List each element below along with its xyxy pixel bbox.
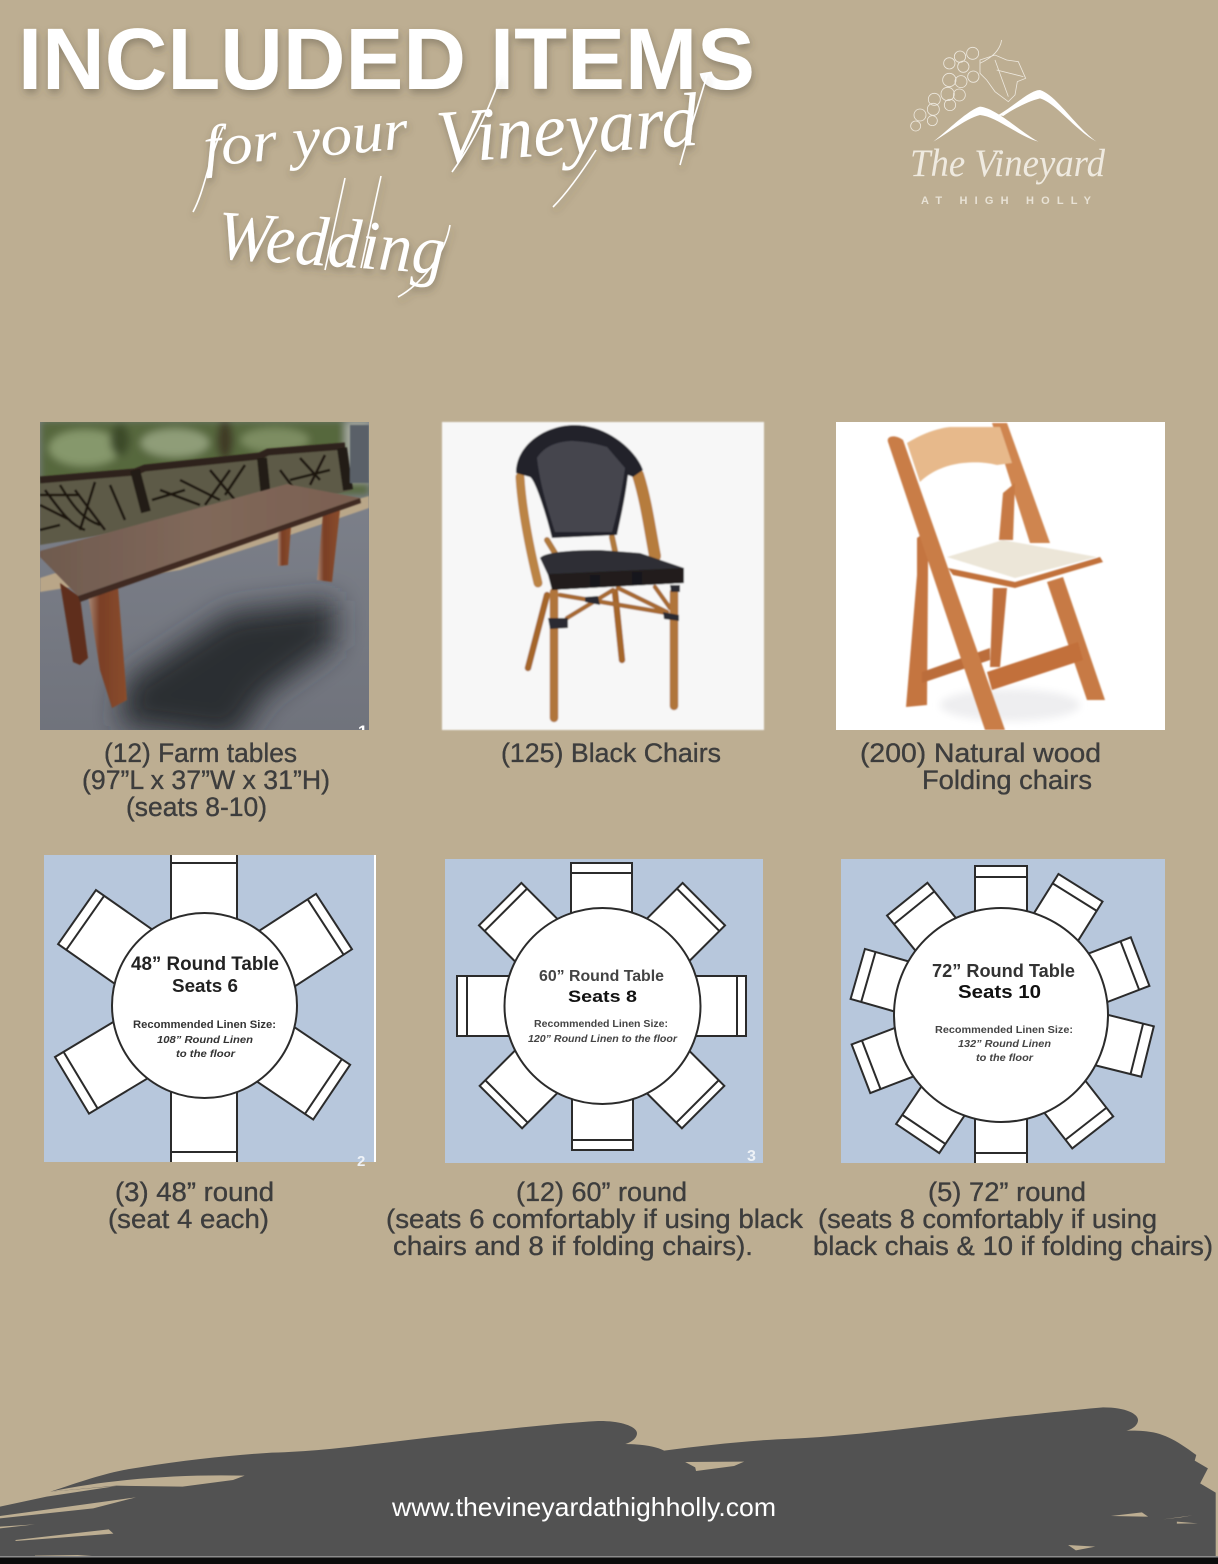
diagram: 72 inch round table bbox=[841, 859, 1165, 1164]
table text bbox=[528, 968, 678, 1045]
label: folding chairs: Folding chairs bbox=[922, 765, 1092, 795]
bottom edge strip bbox=[0, 1556, 1218, 1564]
label: black chairs: (125) Black Chairs bbox=[501, 738, 721, 768]
title: included items: INCLUDED ITEMS bbox=[18, 11, 755, 108]
table text: Recommended Linen Size: bbox=[133, 1019, 276, 1031]
table text: 120” Round Linen to the floor bbox=[528, 1033, 678, 1045]
logo icon: grapes, leaf and mountains bbox=[911, 40, 1097, 142]
label: 72 inch round: (seats 8 comfortably if using bbox=[818, 1204, 1157, 1234]
table text: 60” Round Table bbox=[539, 968, 664, 985]
photo number: 3 bbox=[747, 1148, 756, 1165]
photo: farm table bbox=[40, 420, 369, 741]
label: farm tables: (seats 8-10) bbox=[126, 792, 267, 822]
label: 72 inch round: (5) 72” round bbox=[928, 1177, 1086, 1207]
subtitle: for your Vineyard Wedding: for your bbox=[200, 96, 411, 179]
table text: 108” Round Linen bbox=[157, 1034, 253, 1046]
subtitle: for your Vineyard Wedding: Wedding bbox=[215, 197, 448, 290]
label: 60 inch round: (seats 6 comfortably if using black bbox=[386, 1204, 803, 1234]
table text: Recommended Linen Size: bbox=[935, 1024, 1073, 1036]
label: 60 inch round: (12) 60” round bbox=[516, 1177, 687, 1207]
footer: website url: www.thevineyardathighholly.com bbox=[391, 1492, 776, 1522]
label: 72 inch round: black chais & 10 if folding chairs) bbox=[813, 1231, 1213, 1261]
table text bbox=[131, 954, 279, 1060]
chair back bbox=[516, 425, 643, 538]
logo tagline: AT HIGH HOLLY bbox=[921, 195, 1092, 207]
label: folding chairs: (200) Natural wood bbox=[860, 738, 1101, 768]
table text: 72” Round Table bbox=[932, 961, 1075, 981]
table text: Seats 6 bbox=[172, 976, 238, 996]
label: 48 inch round bbox=[108, 1177, 274, 1234]
label: farm tables bbox=[82, 738, 330, 822]
label: 60 inch round: chairs and 8 if folding chairs). bbox=[393, 1231, 753, 1261]
label: 48 inch round: (3) 48” round bbox=[115, 1177, 274, 1207]
label: 48 inch round: (seat 4 each) bbox=[108, 1204, 269, 1234]
table text: 132” Round Linen bbox=[958, 1038, 1051, 1050]
subtitle: for your Vineyard Wedding bbox=[193, 75, 707, 297]
subtitle: for your Vineyard Wedding: Vineyard bbox=[433, 78, 702, 180]
label: farm tables: (97”L x 37”W x 31”H) bbox=[82, 765, 330, 795]
photo number: 2 bbox=[357, 1153, 365, 1170]
table text: 48” Round Table bbox=[131, 954, 279, 975]
photo number: 1 bbox=[358, 722, 367, 741]
label: 60 inch round bbox=[386, 1177, 803, 1261]
diagram: 60 inch round table bbox=[445, 859, 763, 1165]
photo number: 8 bbox=[1148, 727, 1157, 746]
table text: to the floor bbox=[976, 1052, 1034, 1064]
table text: Seats 8 bbox=[568, 987, 637, 1006]
diagram: 48 inch round table bbox=[44, 845, 376, 1170]
floor shadow bbox=[120, 600, 335, 740]
table text bbox=[932, 961, 1075, 1064]
photo: black bistro chair bbox=[442, 422, 764, 730]
table text: to the floor bbox=[176, 1048, 236, 1060]
footer: dark brush stroke band bbox=[0, 1407, 1216, 1557]
logo wordmark: The Vineyard bbox=[910, 142, 1105, 185]
label: farm tables: (12) Farm tables bbox=[104, 738, 297, 768]
label: 72 inch round bbox=[813, 1177, 1213, 1261]
photo: natural wood folding chair bbox=[836, 422, 1165, 746]
label: folding chairs bbox=[860, 738, 1101, 795]
chair rear legs and frame bbox=[520, 475, 674, 718]
table text: Seats 10 bbox=[958, 982, 1041, 1002]
table text: Recommended Linen Size: bbox=[534, 1018, 668, 1030]
logo: The Vineyard at High Holly bbox=[910, 40, 1105, 207]
chair seat bbox=[540, 550, 684, 590]
